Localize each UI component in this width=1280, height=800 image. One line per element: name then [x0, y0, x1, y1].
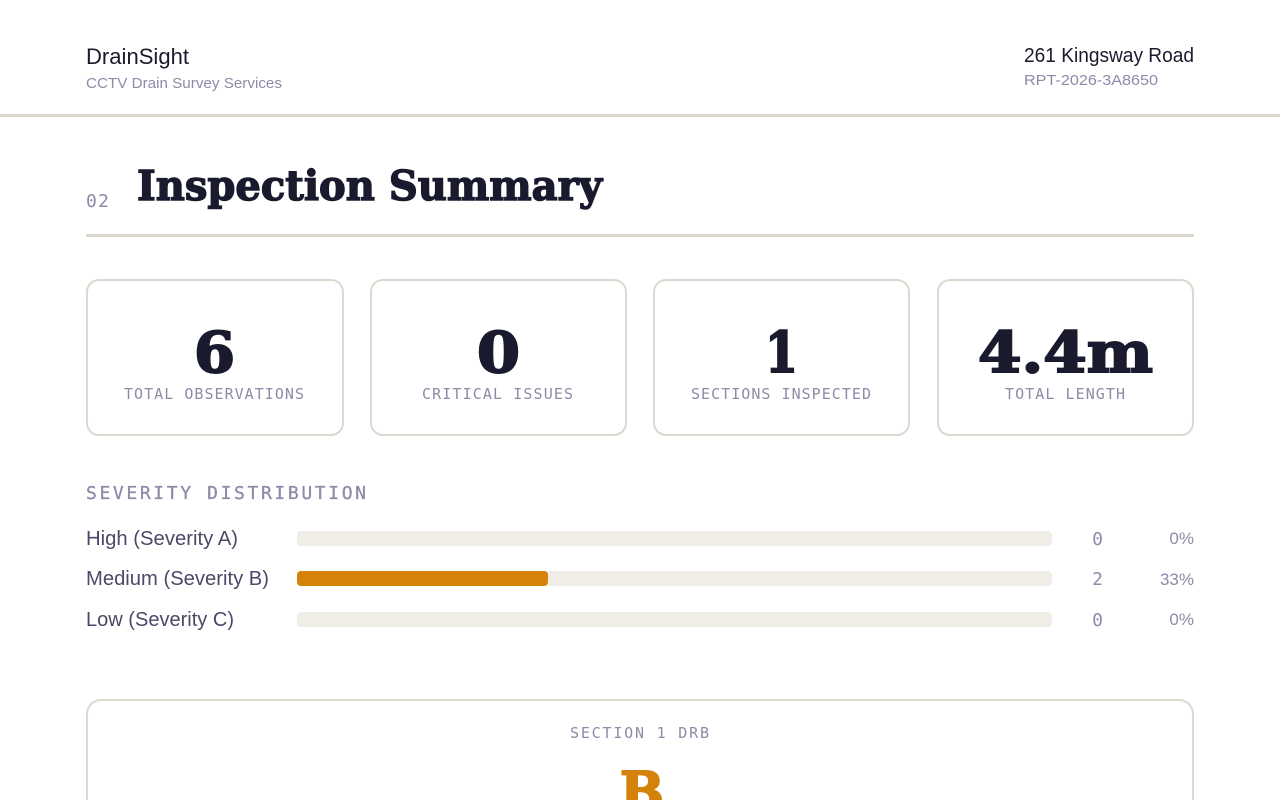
row: low severity	[86, 609, 1194, 631]
card: total observations	[87, 280, 343, 435]
row: low severity: 0%	[1169, 610, 1194, 629]
row: medium severity: 2	[1092, 569, 1103, 590]
section number: 02	[86, 191, 109, 212]
panel: section grade	[87, 700, 1193, 800]
severity distribution chart	[86, 483, 1194, 631]
card: critical issues	[371, 280, 626, 435]
card: total length: TOTAL LENGTH	[1005, 385, 1125, 403]
card: sections inspected: 1	[765, 320, 798, 386]
card: sections inspected: SECTIONS INSPECTED	[691, 385, 871, 403]
card: total observations: 6	[194, 320, 235, 386]
report reference: RPT-2026-3A8650	[1024, 72, 1158, 89]
row: low severity: Low (Severity C)	[86, 609, 234, 631]
row: medium severity: Medium (Severity B)	[86, 568, 269, 590]
company name: DrainSight	[86, 44, 189, 69]
card: total length: 4.4m	[978, 320, 1153, 386]
header rule	[0, 114, 1280, 117]
row: low severity: 0	[1092, 610, 1103, 631]
row: high severity	[86, 528, 1194, 550]
stat cards	[87, 280, 1193, 435]
card: sections inspected	[654, 280, 909, 435]
section label: SECTION 1 DRB	[570, 724, 709, 742]
row: medium severity	[86, 568, 1194, 590]
row: high severity: High (Severity A)	[86, 528, 238, 550]
chart heading: SEVERITY DISTRIBUTION	[86, 483, 366, 504]
card: total length	[938, 280, 1193, 435]
card: total observations: TOTAL OBSERVATIONS	[124, 385, 304, 403]
property address: 261 Kingsway Road	[1024, 45, 1194, 67]
section rule	[86, 234, 1194, 237]
row: high severity: 0%	[1169, 529, 1194, 548]
row: high severity: 0	[1092, 529, 1103, 550]
row: medium severity: 33%	[1160, 570, 1194, 589]
company tagline: CCTV Drain Survey Services	[86, 75, 282, 92]
header	[0, 44, 1280, 117]
section heading	[86, 162, 1194, 237]
card: critical issues: CRITICAL ISSUES	[422, 385, 573, 403]
card: critical issues: 0	[477, 320, 520, 386]
section title: Inspection Summary	[137, 162, 603, 210]
